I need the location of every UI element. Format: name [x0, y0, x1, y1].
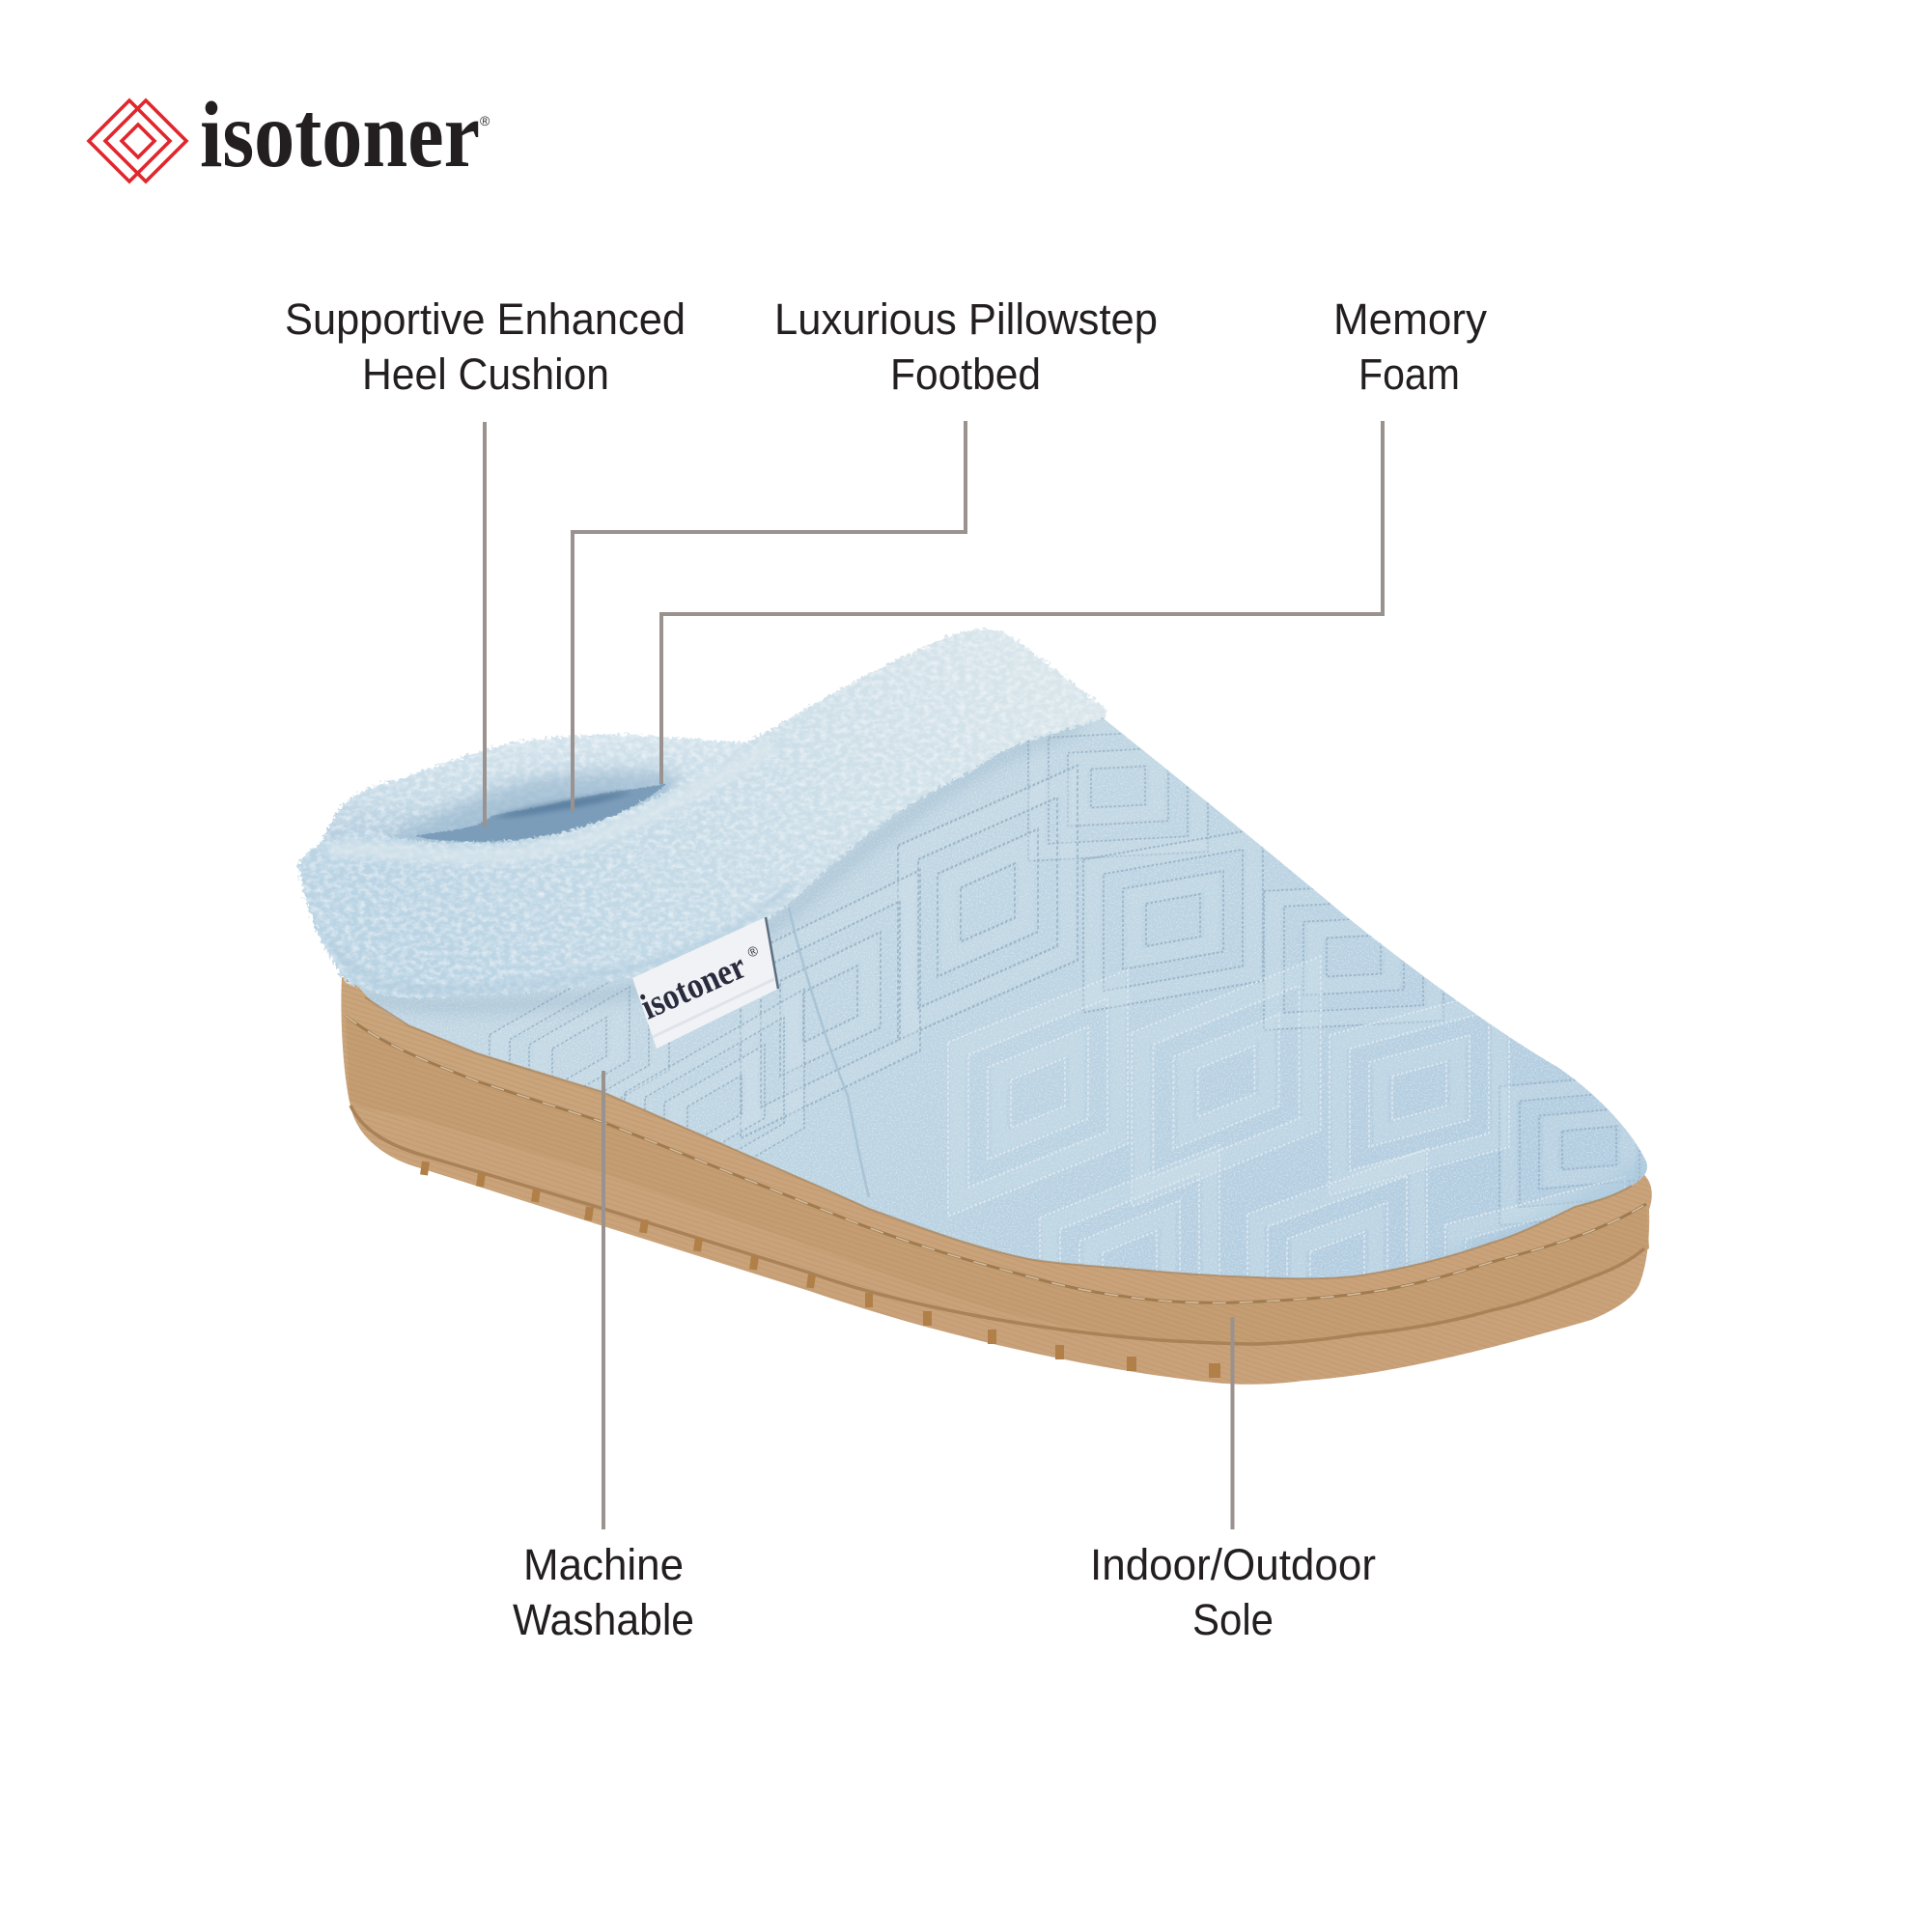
callout line: heel cushion — [483, 422, 487, 827]
logo wordmark: isotoner — [200, 83, 480, 187]
insole dark stripe — [494, 792, 632, 817]
logo: isotoner — [89, 83, 490, 187]
label: Indoor/Outdoor Sole — [1090, 1540, 1376, 1644]
slipper illustration — [298, 629, 1679, 1391]
vamp seam — [789, 908, 869, 1197]
label: Memory Foam: Memory — [1333, 294, 1487, 344]
label: Memory Foam: Foam — [1358, 350, 1460, 399]
upper fabric with diamond quilting — [359, 717, 1647, 1278]
shadow under the collar — [357, 724, 1081, 1006]
label: Memory Foam — [1333, 294, 1487, 399]
welt line along the fabric edge — [365, 997, 1632, 1278]
collar rim highlight — [328, 745, 772, 856]
label: Indoor/Outdoor Sole: Indoor/Outdoor — [1090, 1540, 1376, 1589]
toe-side shading — [1406, 1162, 1647, 1266]
label: Luxurious Pillowstep Footbed: Footbed — [890, 350, 1041, 399]
label: Luxurious Pillowstep Footbed — [774, 294, 1158, 399]
tag registered mark: ® — [745, 942, 761, 961]
callout line: indoor/outdoor sole — [1230, 1317, 1234, 1529]
insole — [415, 784, 666, 842]
back collar lining — [319, 735, 772, 859]
callout line: pillowstep footbed — [573, 421, 966, 812]
collar shading on the heel edge — [328, 883, 794, 990]
logo registered mark: ® — [480, 113, 490, 128]
label: Machine Washable: Machine — [523, 1540, 684, 1589]
sewn-in brand tag — [632, 917, 778, 1049]
icon: red nested diamonds — [89, 100, 186, 182]
label: Indoor/Outdoor Sole: Sole — [1192, 1595, 1274, 1644]
label: Machine Washable: Washable — [513, 1595, 694, 1644]
label: Supportive Enhanced Heel Cushion: Supportive Enhanced — [285, 294, 686, 344]
front fur collar — [298, 629, 1106, 997]
sole — [341, 977, 1652, 1385]
label: Supportive Enhanced Heel Cushion: Heel Cushion — [362, 350, 609, 399]
label: Machine Washable — [513, 1540, 694, 1644]
soft shadow inside the opening — [381, 770, 676, 850]
tag wordmark: isotoner — [635, 945, 752, 1027]
label: Supportive Enhanced Heel Cushion — [285, 294, 686, 399]
callout line: machine washable — [602, 1071, 605, 1529]
callout line: memory foam — [661, 421, 1383, 784]
sole lugs — [420, 1162, 1220, 1378]
label: Luxurious Pillowstep Footbed: Luxurious Pillowstep — [774, 294, 1158, 344]
